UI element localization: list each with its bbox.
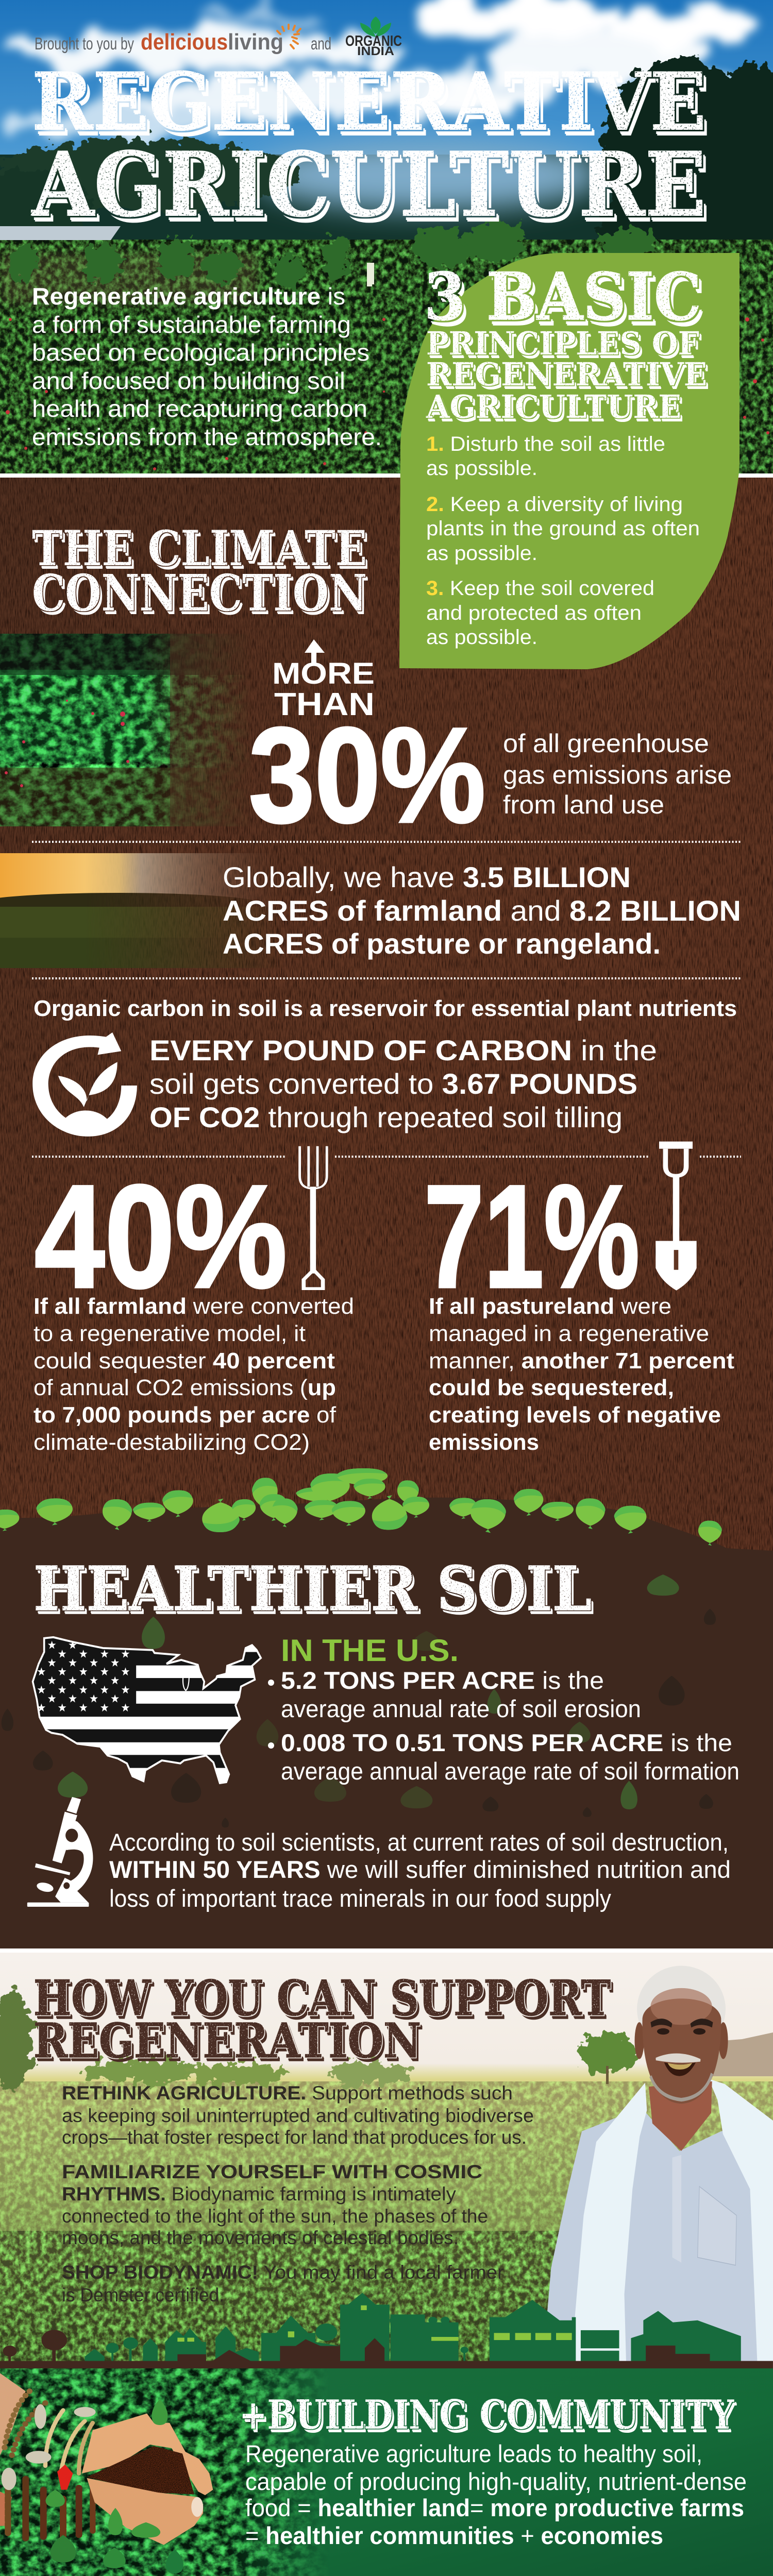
support actions text: RETHINK AGRICULTURE. Support methods such <box>62 2082 513 2104</box>
photo: sunset field <box>0 853 283 968</box>
foreground leaves <box>46 2399 183 2573</box>
principles list: plants in the ground as often <box>426 517 700 540</box>
principles list: and protected as often <box>426 602 642 624</box>
skyline silhouette <box>0 2293 773 2369</box>
farm shed roof <box>0 226 121 240</box>
community paragraph: Regenerative agriculture leads to healthy soil, <box>245 2440 702 2467</box>
photo: field background <box>0 1953 773 2362</box>
principles list: 3. Keep the soil covered <box>426 577 654 600</box>
intro paragraph: a form of sustainable farming <box>32 311 351 338</box>
red thread <box>57 2464 73 2490</box>
community paragraph: = healthier communities + economies <box>245 2522 663 2549</box>
support actions text: FAMILIARIZE YOURSELF WITH COSMIC <box>62 2161 482 2182</box>
person in field <box>367 263 374 286</box>
support actions text: is Demeter certified. <box>62 2284 224 2306</box>
icon: sunburst <box>277 25 300 48</box>
panel heading: REGENERATIVE <box>426 355 707 393</box>
icon: pitchfork <box>300 1146 327 1289</box>
stat: 40 percent <box>33 1155 354 1455</box>
sponsor line: INDIA <box>357 44 394 58</box>
panel: 3 basic principles <box>399 253 740 669</box>
support actions text: as keeping soil uninterrupted and cultivating biodiverse <box>62 2105 534 2126</box>
leaves on soil <box>0 1468 722 1546</box>
stat: every pound of carbon: OF CO2 through repeated soil tilling <box>149 1101 623 1133</box>
soil in hands <box>87 2446 195 2495</box>
soil destruction statement <box>109 1828 731 1912</box>
soil destruction statement: loss of important trace minerals in our food supply <box>109 1885 611 1912</box>
panel heading: AGRICULTURE <box>426 388 681 426</box>
intro paragraph: and focused on building soil <box>32 367 345 394</box>
stat: 40 percent: of annual CO2 emissions ( up <box>33 1375 336 1400</box>
support actions text: connected to the light of the sun, the phases of the <box>62 2206 488 2227</box>
sponsor line: Brought to you by <box>35 34 134 53</box>
tassels <box>2 2404 96 2490</box>
title <box>31 56 706 236</box>
in the u.s. facts <box>268 1633 740 1785</box>
white divider <box>0 473 773 478</box>
upper hand <box>82 2413 213 2495</box>
background leaves <box>2 1574 716 1827</box>
principles list <box>426 433 700 649</box>
farmer portrait <box>543 1966 773 2363</box>
sponsor line: and <box>311 34 331 53</box>
stat: 40 percent: climate-destabilizing CO2) <box>33 1430 310 1455</box>
stat: 40 percent: to 7,000 pounds per acre of <box>33 1402 337 1428</box>
stat: 71 percent: If all pastureland were <box>429 1294 671 1319</box>
stat: every pound of carbon: soil gets converted to 3.67 POUNDS <box>149 1067 637 1100</box>
panel heading <box>424 259 707 426</box>
stat: global farmland acres <box>223 861 741 960</box>
title: AGRICULTURE <box>31 133 706 236</box>
stat: 71 percent <box>424 1155 734 1455</box>
panel heading: 3 BASIC <box>424 259 701 335</box>
lower hand <box>87 2478 203 2545</box>
title: REGENERATIVE <box>32 56 706 148</box>
intro paragraph: Regenerative agriculture is <box>32 283 345 310</box>
soil destruction statement: According to soil scientists, at current rates of soil destruction, <box>109 1828 729 1856</box>
sponsor line <box>35 16 402 58</box>
heading: healthier soil: HEALTHIER SOIL <box>33 1553 592 1624</box>
intro paragraph: based on ecological principles <box>32 339 369 366</box>
stat: 71 percent: emissions <box>429 1430 539 1455</box>
sponsor line: delicious <box>141 29 228 55</box>
heading: the climate connection: CONNECTION <box>32 564 367 622</box>
bead bracelets <box>4 2391 93 2538</box>
in the u.s. facts: IN THE U.S. <box>281 1633 459 1668</box>
support actions text: RHYTHMS. Biodynamic farming is intimately <box>62 2183 457 2205</box>
support actions text: SHOP BIODYNAMIC! You may find a local farmer <box>62 2262 504 2283</box>
stat: more than 30%: gas emissions arise <box>503 760 732 789</box>
icon: shovel <box>656 1142 697 1291</box>
stat: 40 percent: If all farmland were converted <box>33 1294 354 1319</box>
support actions text <box>62 2082 534 2306</box>
stat: 71 percent: creating levels of negative <box>429 1402 721 1428</box>
photo: green meadow <box>0 634 253 826</box>
panel: healthier soil background <box>0 1498 773 1948</box>
intro paragraph: health and recapturing carbon <box>32 395 367 422</box>
stat: more than 30% <box>249 639 732 851</box>
stat: 71 percent: 71% <box>424 1155 640 1318</box>
heading: how you can support regeneration <box>33 1970 611 2069</box>
icon: plant recycle circle <box>40 1032 129 1131</box>
in the u.s. facts: average annual average rate of soil formation <box>281 1757 740 1785</box>
climate section background: brown canvas <box>0 478 773 1554</box>
stat: more than 30%: of all greenhouse <box>503 729 709 758</box>
farmer shirt <box>543 2108 773 2363</box>
principles list: as possible. <box>426 542 537 565</box>
sponsor line: living <box>228 29 283 55</box>
map: us flag map <box>28 1637 267 1786</box>
farmer neck <box>649 2081 712 2151</box>
stat: global farmland acres: ACRES of farmland and 8.2 BILLION <box>223 894 741 927</box>
stat: 40 percent: could sequester 40 percent <box>33 1348 335 1374</box>
support actions text: crops—that foster respect for land that produces for us. <box>62 2127 527 2148</box>
stat: more than 30%: from land use <box>503 790 664 819</box>
soil destruction statement: WITHIN 50 YEARS we will suffer diminished nutrition and <box>109 1856 731 1883</box>
heading: how you can support regeneration: HOW YOU CAN SUPPORT <box>33 1970 611 2027</box>
heading: the climate connection <box>32 520 367 622</box>
farmer head <box>635 1966 728 2104</box>
stat: global farmland acres: Globally, we have 3.5 BILLION <box>223 861 631 893</box>
community paragraph: capable of producing high-quality, nutrient-dense <box>245 2468 747 2495</box>
in the u.s. facts: average annual rate of soil erosion <box>281 1695 641 1722</box>
photo: hands holding soil <box>0 2368 330 2576</box>
in the u.s. facts: 5.2 TONS PER ACRE is the <box>281 1667 604 1694</box>
heading: the climate connection: THE CLIMATE <box>32 520 367 577</box>
principles list: 2. Keep a diversity of living <box>426 493 683 516</box>
community paragraph: food = healthier land= more productive farms <box>245 2494 744 2521</box>
forearm <box>0 2373 26 2455</box>
stat: 71 percent: could be sequestered, <box>429 1375 674 1400</box>
intro paragraph: emissions from the atmosphere. <box>32 423 382 450</box>
support actions text: moons, and the movements of celestial bodies. <box>62 2227 459 2248</box>
principles list: as possible. <box>426 626 537 649</box>
icon: up arrow <box>305 639 325 666</box>
stat: more than 30%: MORE <box>272 657 375 690</box>
panel heading: PRINCIPLES OF <box>426 325 699 362</box>
stat: 40 percent: to a regenerative model, it <box>33 1321 306 1346</box>
icon: organic india leaf <box>360 16 391 37</box>
principles list: as possible. <box>426 457 537 480</box>
shirt pocket <box>698 2187 736 2265</box>
stat: global farmland acres: ACRES of pasture or rangeland. <box>223 927 661 960</box>
heading: how you can support regeneration: REGENERATION <box>33 2013 421 2069</box>
in the u.s. facts: 0.008 TO 0.51 TONS PER ACRE is the <box>281 1729 732 1756</box>
community paragraph <box>245 2440 747 2549</box>
icon: microscope <box>27 1797 93 1907</box>
statement: organic carbon: Organic carbon in soil is a reservoir for essential plant nutrients <box>33 996 737 1021</box>
intro paragraph <box>32 283 382 450</box>
ground strip <box>0 2361 773 2369</box>
stat: every pound of carbon <box>149 1034 657 1133</box>
stat: 71 percent: manner, another 71 percent <box>429 1348 734 1374</box>
stat: 40 percent: 40% <box>35 1155 287 1318</box>
brown trees <box>3 2330 275 2362</box>
stat: more than 30%: THAN <box>274 687 375 722</box>
white scarf <box>571 2079 773 2363</box>
sponsor line: ORGANIC <box>345 33 402 49</box>
stat: every pound of carbon: EVERY POUND OF CARBON in the <box>149 1034 657 1066</box>
principles list: 1. Disturb the soil as little <box>426 433 665 455</box>
panel: building community background <box>0 2368 773 2576</box>
stat: more than 30%: 30% <box>249 700 485 851</box>
header photo: sky, trees and field <box>0 0 773 478</box>
stat: 71 percent: managed in a regenerative <box>429 1321 709 1346</box>
